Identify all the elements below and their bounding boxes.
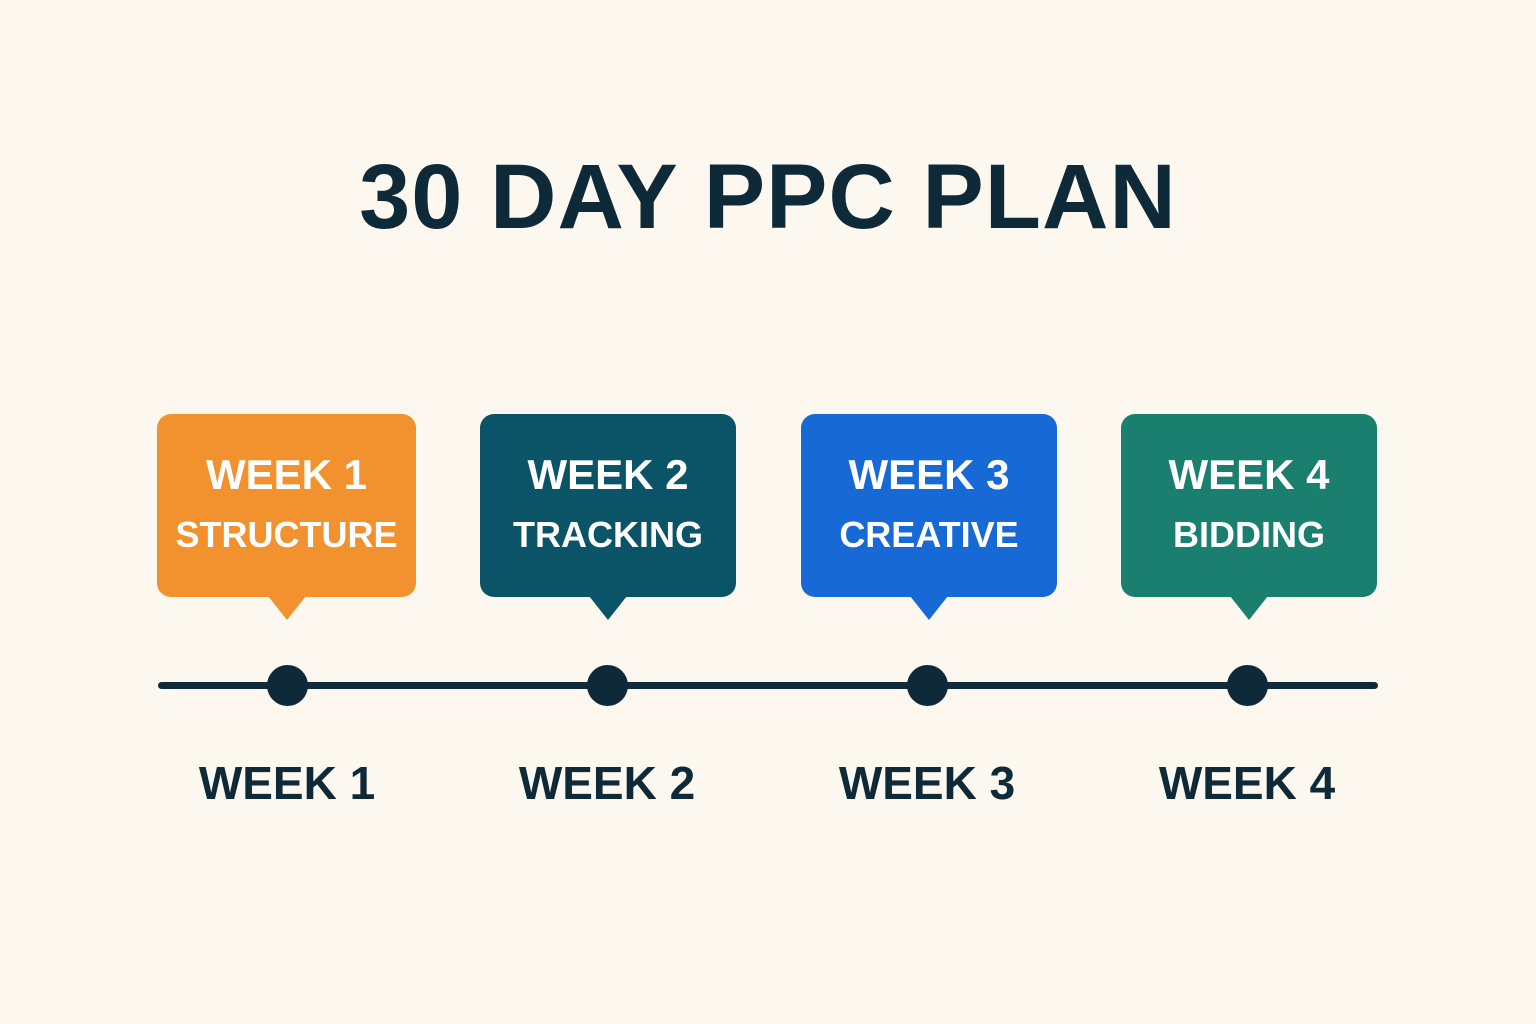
timeline dot 1: [267, 665, 308, 706]
label week 3: WEEK 3: [839, 757, 1015, 809]
label week 4: WEEK 4: [1159, 757, 1335, 809]
callout: week 2 tracking: WEEK 2: [527, 451, 689, 498]
timeline line: [158, 682, 1378, 689]
label week 1: WEEK 1: [199, 757, 375, 809]
callout: week 2 tracking: TRACKING: [513, 514, 703, 555]
timeline dot 4: [1227, 665, 1268, 706]
callout: week 4 bidding: BIDDING: [1173, 514, 1325, 555]
title: 30 DAY PPC PLAN: [359, 146, 1177, 248]
callout: week 3 creative: WEEK 3: [848, 451, 1010, 498]
label week 2: WEEK 2: [519, 757, 695, 809]
callout: week 2 tracking: [480, 414, 736, 597]
callout: week 1 structure: [157, 414, 416, 597]
timeline dot 2: [587, 665, 628, 706]
callout: week 3 creative: CREATIVE: [839, 514, 1019, 555]
timeline dot 3: [907, 665, 948, 706]
callout: week 1 structure: WEEK 1: [206, 451, 367, 498]
callout: week 4 bidding: WEEK 4: [1168, 451, 1330, 498]
callout: week 1 structure: STRUCTURE: [176, 514, 398, 555]
callout: week 4 bidding: [1121, 414, 1377, 597]
callout: week 3 creative: [801, 414, 1057, 597]
